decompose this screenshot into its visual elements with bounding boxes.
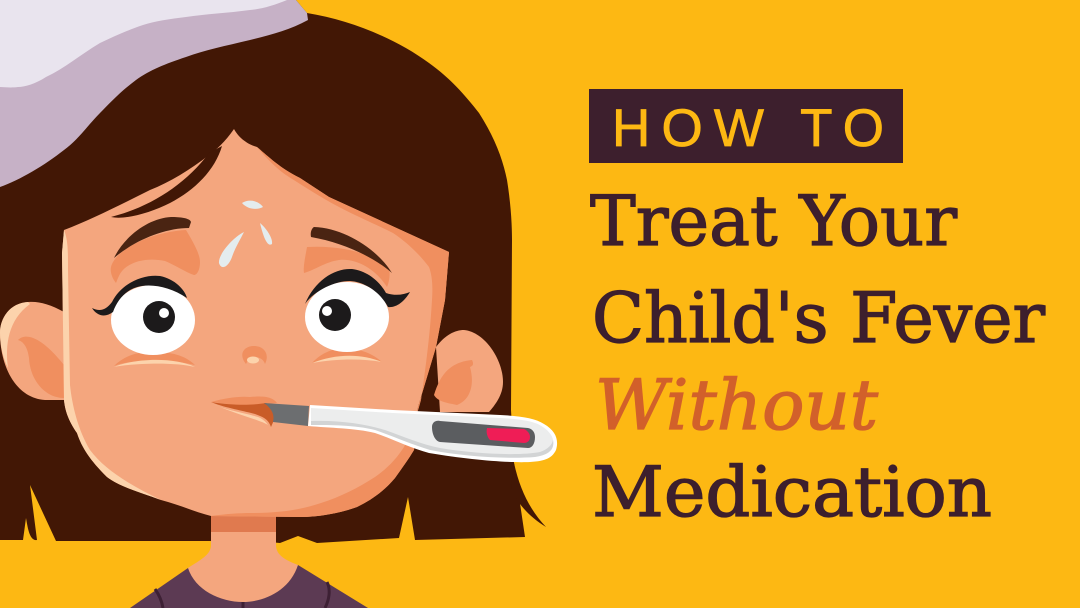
right ear [434,330,503,412]
nose [242,346,267,364]
thermometer red reading [487,428,530,443]
how-to banner [589,89,903,163]
hair [0,0,546,543]
hair strand [111,146,222,218]
thermometer probe [264,403,309,426]
heading: Without: Without [595,366,878,446]
left eye [92,276,195,355]
cloth on forehead [0,0,308,187]
illustration: sick child [0,0,557,608]
right eye [305,269,410,352]
thermometer display [432,421,535,448]
heading: Medication: Medication [592,453,992,533]
sweat drops [219,201,272,267]
left eyebrow [114,217,191,258]
how-to banner: HOW TO [612,99,884,158]
thermometer [264,403,557,462]
right eyebrow [311,227,392,273]
left ear [0,302,66,400]
shirt [130,565,368,608]
left under-eye [114,352,195,366]
face shading: right and lower rim [211,147,449,517]
right under-eye [312,348,382,363]
thermometer body [308,405,557,462]
face [62,129,449,517]
mouth [211,397,277,427]
face highlight: left rim [62,230,161,500]
left eye shadow [111,230,200,283]
under-eye highlights [114,356,382,367]
heading: Child's Fever: Child's Fever [592,279,1045,359]
title block [589,89,1045,533]
right eye shadow [304,247,390,287]
neck [188,510,298,602]
heading: Treat Your: Treat Your [590,182,957,262]
